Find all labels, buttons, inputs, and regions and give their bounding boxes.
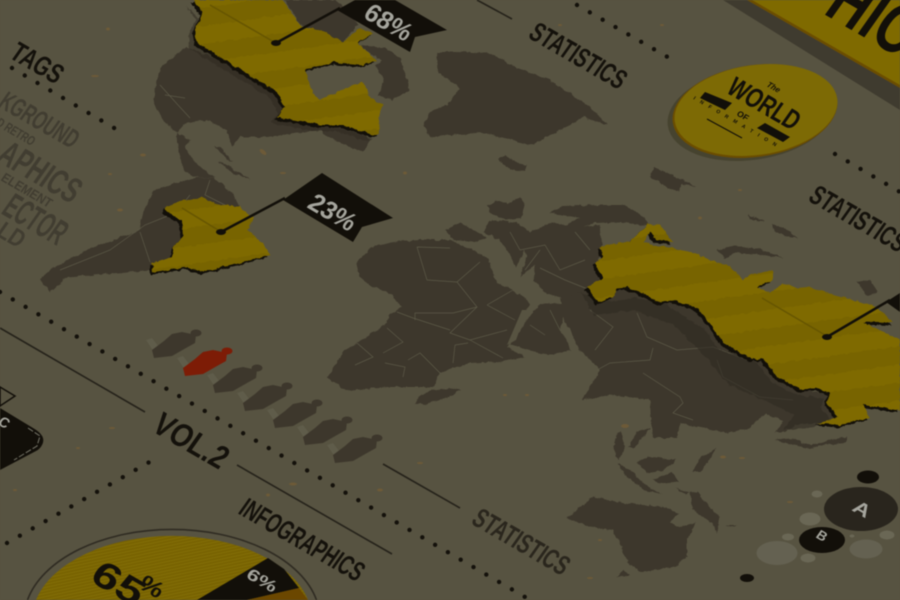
land: Antilles bbox=[213, 145, 250, 180]
land: Asia bbox=[560, 285, 838, 438]
land: Svalbard bbox=[650, 167, 697, 192]
solid divider lines bbox=[0, 0, 512, 554]
label: STATISTICS top: STATISTICS bbox=[523, 16, 633, 95]
land: South America bbox=[40, 177, 240, 293]
pie chart bbox=[28, 529, 316, 600]
person 2 (red) bbox=[177, 348, 232, 376]
land: Middle East bbox=[510, 303, 573, 355]
land: Southeast Asia islands bbox=[614, 427, 717, 494]
person 7 bbox=[327, 434, 382, 463]
flag: 23%: 23% bbox=[302, 189, 362, 237]
land: Iceland bbox=[498, 155, 527, 171]
map: country borders bbox=[60, 85, 793, 420]
map: Red Sea and Persian Gulf bbox=[507, 310, 580, 357]
person 6 bbox=[297, 416, 352, 445]
people pictogram row bbox=[146, 330, 382, 463]
land: arctic Canada bbox=[285, 0, 410, 100]
land: Madagascar bbox=[415, 388, 461, 405]
land: New Guinea bbox=[690, 491, 737, 532]
badge: The World of Information: WORLD bbox=[721, 71, 807, 136]
highlighted country: South America bbox=[150, 197, 270, 274]
land: Spain bbox=[445, 222, 487, 242]
land: British Isles bbox=[487, 197, 525, 220]
top-right title banner bbox=[723, 0, 900, 110]
badge: The World of Information: INFORMATION bbox=[692, 96, 780, 150]
land: North America bbox=[153, 47, 370, 178]
person 4 bbox=[237, 382, 292, 411]
left black badge bbox=[0, 387, 43, 470]
land: Africa bbox=[327, 240, 530, 390]
label: VOL.2: VOL.2 bbox=[146, 405, 237, 476]
person 5 bbox=[267, 400, 322, 428]
bubble cluster legend: A bbox=[849, 496, 876, 522]
badge: The World of Information bbox=[661, 54, 844, 171]
flag: 68% bbox=[271, 0, 447, 52]
bubble cluster legend bbox=[740, 470, 898, 582]
person 3 bbox=[207, 364, 262, 393]
land: Japan bbox=[775, 420, 847, 449]
land: Australia bbox=[567, 497, 697, 578]
tag list text: ELEMENT bbox=[0, 170, 56, 210]
highlighted country: North America bbox=[186, 0, 383, 141]
heading: TAGS: TAGS bbox=[4, 36, 70, 89]
land: Arctic islands bbox=[717, 215, 878, 296]
person 1 bbox=[146, 330, 202, 358]
tag list text bbox=[0, 86, 90, 253]
flag: 68%: 68% bbox=[358, 0, 418, 47]
land: Scandinavia bbox=[550, 205, 650, 230]
land: Europe bbox=[483, 220, 605, 298]
pie chart: 6% bbox=[243, 565, 282, 597]
flag: Russia pole bbox=[822, 293, 900, 340]
bubble cluster legend: B bbox=[813, 527, 831, 544]
flag: 23% bbox=[216, 173, 393, 242]
badge: The World of Information: The bbox=[765, 80, 783, 95]
land: Greenland bbox=[423, 52, 608, 145]
highlighted country: Russia bbox=[581, 224, 900, 430]
badge: The World of Information: OF bbox=[735, 109, 751, 123]
